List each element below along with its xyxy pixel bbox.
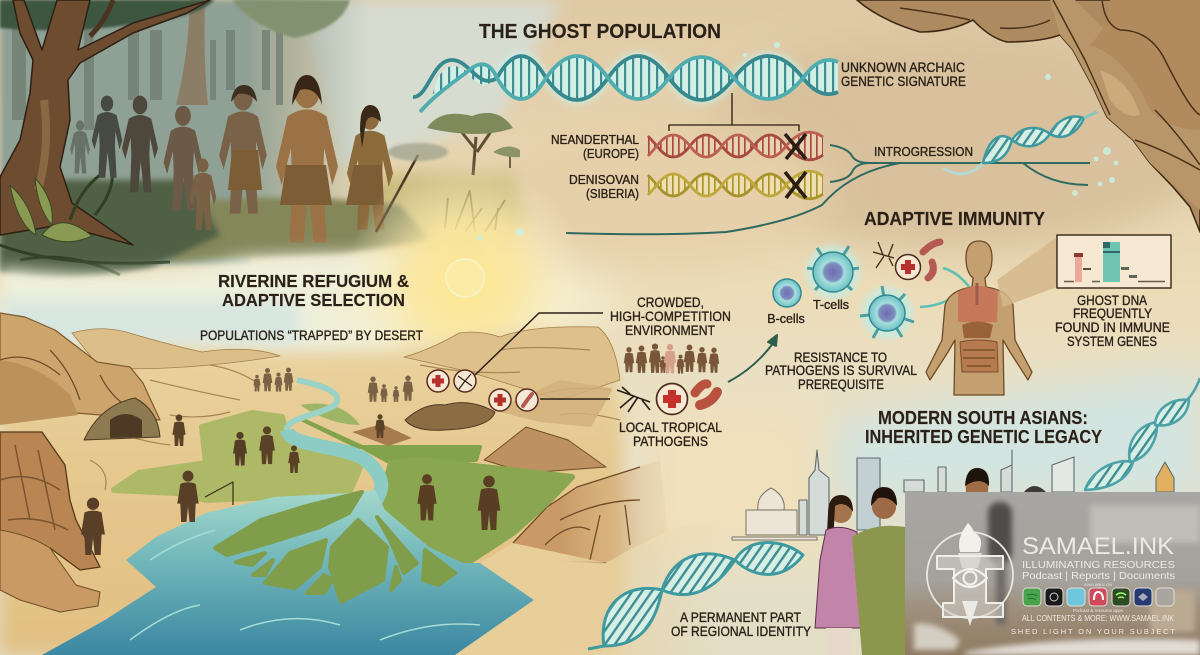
green field strip by river (300, 404, 360, 425)
heading: adaptive immunity: ADAPTIVE IMMUNITY (864, 209, 1045, 229)
label: unknown archaic genetic signature (841, 60, 966, 89)
heading: modern south asians: MODERN SOUTH ASIANS: (878, 408, 1088, 428)
chart: ghost dna in immune genes (1057, 235, 1171, 288)
label: introgression: INTROGRESSION (874, 144, 973, 159)
right dna helix (1085, 378, 1200, 490)
forest background left (0, 0, 250, 270)
left rock cliff (0, 432, 100, 570)
photo backdrop (905, 492, 1200, 655)
logo slogan: SHED LIGHT ON YOUR SUBJECT (1011, 627, 1175, 636)
text: resistance to pathogens: PREREQUISITE (798, 377, 884, 392)
hair of leading man (292, 75, 322, 105)
background tint: warm centre (490, 120, 830, 260)
right green field (379, 460, 572, 563)
farmers (417, 474, 437, 520)
blurred microphone (988, 502, 1012, 625)
blurred paper left (914, 623, 960, 650)
mat with seated person (352, 414, 412, 446)
heading: modern south asians (865, 408, 1102, 447)
logo subline: Podcast | Reports | Documents (1022, 571, 1175, 582)
text: ghost dna frequently found (1055, 293, 1170, 349)
panel: riverine desert landscape (0, 313, 720, 655)
right group (368, 376, 413, 402)
label: t-cells: T-cells (813, 298, 849, 312)
ghost dna callout wedge (997, 237, 1057, 307)
immune cells (773, 245, 914, 339)
text: ghost dna frequently found: SYSTEM GENES (1067, 334, 1157, 349)
sun disc (446, 259, 484, 297)
text: resistance to pathogens (765, 350, 917, 392)
sun glow (345, 162, 585, 402)
background tint: cream mid (640, 400, 830, 560)
delta islands (215, 492, 455, 602)
camp boulders (405, 403, 495, 430)
river (287, 380, 381, 506)
main teal dna helix (413, 56, 838, 112)
right rock outline and cracks (513, 467, 640, 563)
desert people (81, 368, 500, 555)
x mark: denisovan extinct (785, 172, 806, 198)
text: populations trapped by desert: POPULATIONS “TRAPPED” BY DESERT (200, 328, 423, 343)
leader line: tropical pathogens (540, 398, 610, 400)
forest floor (170, 198, 430, 262)
loincloths (228, 150, 384, 205)
t-cell (806, 245, 860, 299)
heading: riverine refugium (218, 271, 409, 310)
label: b-cells: B-cells (767, 312, 805, 326)
yellow dna helix (648, 171, 823, 199)
heading: modern south asians: INHERITED GENETIC LEGACY (865, 427, 1102, 447)
text: resistance to pathogens: RESISTANCE TO (794, 350, 887, 365)
logo contact line: ALL CONTENTS & MORE: WWW.SAMAEL.INK (1022, 613, 1174, 623)
child (190, 158, 216, 230)
text: ghost dna frequently found: GHOST DNA (1077, 293, 1147, 308)
text: permanent part of regional identity: OF REGIONAL IDENTITY (671, 623, 812, 639)
text: permanent part of regional identity: A PERMANENT PART (680, 609, 801, 625)
far group (254, 368, 293, 392)
label: denisovan: DENISOVAN (569, 172, 639, 187)
man (219, 86, 267, 213)
platform icons (1023, 588, 1174, 606)
title: the ghost population: THE GHOST POPULATION (479, 21, 721, 43)
cave shelter (84, 398, 160, 440)
upper left hill (0, 313, 160, 420)
tree canopy (0, 0, 215, 30)
heading: riverine refugium: ADAPTIVE SELECTION (222, 290, 405, 310)
shadow figure (92, 96, 122, 178)
text: crowded environment (610, 294, 731, 338)
background tint: tan upper right (700, 30, 1200, 250)
leading man (276, 76, 338, 242)
logo panel: samael.ink (905, 492, 1200, 655)
savanna grass (445, 190, 505, 232)
blurred paper bottom (965, 639, 1200, 655)
hair of leading woman (360, 105, 381, 148)
text: ghost dna frequently found: FREQUENTLY (1073, 306, 1152, 321)
text: crowded environment: HIGH-COMPETITION (610, 308, 731, 324)
brown mid tree (176, 0, 208, 105)
desert ground (0, 332, 625, 655)
sparkle dots (477, 42, 1118, 241)
crouching person (172, 414, 186, 446)
label: unknown archaic genetic signature: GENETIC SIGNATURE (841, 74, 966, 89)
farm group (233, 432, 247, 466)
river delta water (42, 490, 534, 655)
background tint: pale blue lower right (760, 370, 1200, 500)
acacia trees (388, 113, 520, 175)
text: permanent part of regional identity (671, 609, 812, 639)
savanna ground (350, 172, 525, 245)
man in green (852, 487, 905, 655)
ferns (0, 170, 170, 275)
cave rock top right (857, 0, 1200, 232)
left green bank (114, 413, 362, 500)
woman at rear (164, 106, 202, 210)
pale band below forest (0, 254, 400, 350)
text: resistance to pathogens: PATHOGENS IS SURVIVAL (765, 363, 917, 378)
blurred window light (1090, 505, 1200, 543)
label: neanderthal (551, 132, 639, 161)
activated t-cell (860, 286, 914, 339)
distant hills right (404, 327, 620, 400)
text: local tropical pathogens (619, 419, 722, 449)
introgression lines (566, 145, 1090, 234)
upper right green strip (303, 420, 480, 463)
b-cell (773, 279, 801, 307)
arrow: pathogens to immune cells (728, 335, 777, 382)
small pathogen icons on map (427, 370, 538, 411)
human body anatomy (926, 241, 1032, 395)
right rock formation (513, 460, 668, 563)
blurred book stack (1150, 590, 1195, 632)
woman in pink (815, 495, 862, 655)
text: ghost dna frequently found: FOUND IN IMMUNE (1055, 320, 1170, 335)
big foreground tree (0, 0, 210, 245)
right peak rock (484, 427, 606, 473)
taj mahal (732, 488, 817, 540)
haze sky (300, 0, 560, 170)
heads behind logo (965, 468, 1046, 492)
label: neanderthal: (EUROPE) (583, 146, 639, 161)
small dna helix at introgression (943, 112, 1097, 174)
x mark: neanderthal extinct (785, 134, 806, 159)
label: unknown archaic genetic signature: UNKNOWN ARCHAIC (841, 60, 965, 75)
pathogen icons (873, 242, 940, 280)
logo tagline: ILLUMINATING RESOURCES (1022, 559, 1175, 571)
label: denisovan (569, 172, 639, 201)
emblem (927, 523, 1013, 626)
distant figure (70, 120, 90, 174)
water ripples (130, 530, 480, 640)
available on caption: AVAILABLE ON (1084, 582, 1112, 587)
teal arrows into body (920, 268, 970, 307)
text: local tropical pathogens: LOCAL TROPICAL (619, 419, 722, 435)
desert contour lines (90, 348, 620, 490)
text: crowded environment: ENVIRONMENT (625, 322, 715, 338)
label: denisovan: (SIBERIA) (586, 186, 639, 201)
pale glow towards centre (320, 265, 620, 345)
small app caption: Podcast & resource apps (1073, 608, 1124, 613)
text: local tropical pathogens: PATHOGENS (633, 433, 708, 449)
forest background fade (240, 0, 370, 250)
tropical pathogen icons (617, 384, 717, 414)
heading: riverine refugium: RIVERINE REFUGIUM & (218, 271, 409, 291)
leading woman (347, 106, 393, 230)
bracket from ghost dna (669, 93, 799, 131)
hair of man (231, 85, 257, 102)
seated man (81, 498, 105, 555)
right lower sand (455, 520, 720, 655)
red dna helix (648, 132, 823, 160)
shadow figure (122, 96, 158, 192)
distant hills left (72, 329, 280, 369)
fisher (177, 471, 199, 522)
text: crowded environment: CROWDED, (637, 294, 704, 310)
lower dna helix (588, 542, 803, 649)
background trees (12, 20, 283, 130)
leader line: crowded environment (475, 313, 603, 375)
spear (376, 155, 418, 232)
crowd icons (624, 343, 719, 374)
logo wordmark: SAMAEL.INK (1022, 533, 1174, 560)
fishing rod (205, 482, 233, 505)
panel: forest and savanna scene (0, 0, 560, 278)
city skyline (799, 450, 1174, 655)
pale blue haze (0, 300, 300, 345)
label: neanderthal: NEANDERTHAL (551, 132, 639, 147)
hominin group (70, 75, 418, 242)
